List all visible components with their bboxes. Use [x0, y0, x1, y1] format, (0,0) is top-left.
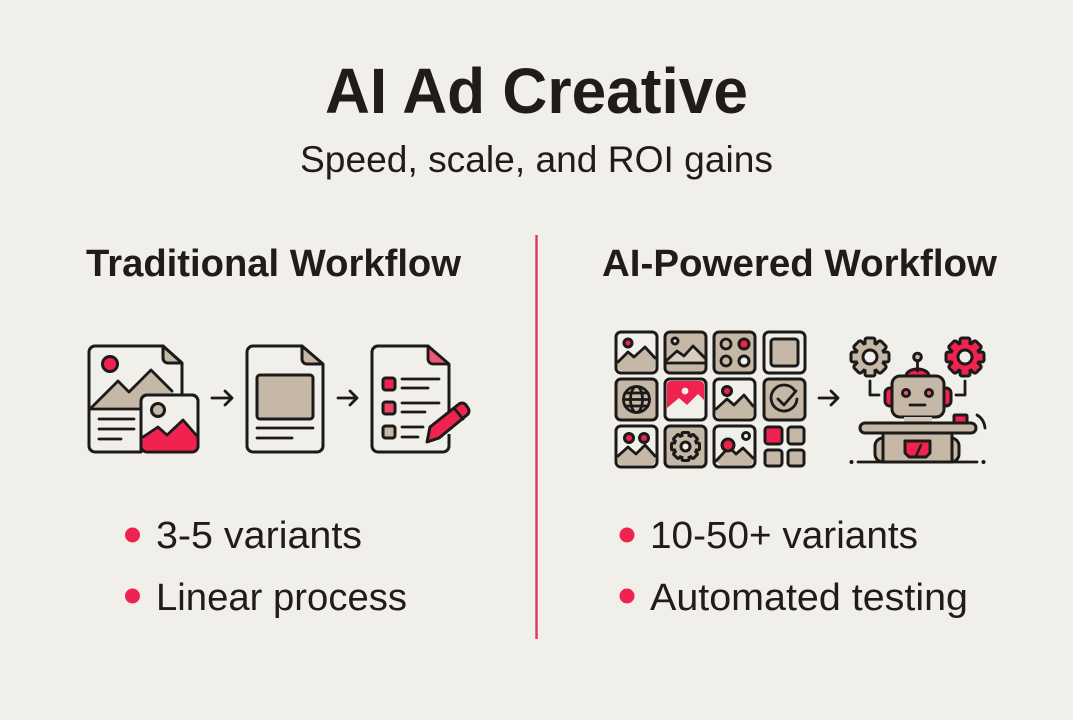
tile: image, red circle [714, 426, 755, 467]
tile: globe [616, 379, 657, 420]
list: AI workflow bullets [620, 515, 968, 619]
icon: red gear [946, 338, 984, 376]
tile: check circle [764, 379, 805, 420]
tile: red image [665, 379, 706, 420]
arrow: step one to two [212, 391, 232, 405]
list: AI workflow bullets: Automated testing [650, 577, 968, 619]
tile: image, two red suns [616, 426, 657, 467]
icon grid: creative variants [616, 332, 805, 467]
center divider [535, 235, 538, 639]
icon: image document [89, 346, 198, 452]
heading: AI-powered workflow: AI-Powered Workflow [602, 243, 997, 285]
tile: image, red sun [616, 332, 657, 373]
list: traditional workflow bullets: 3-5 variants [156, 515, 362, 557]
list: traditional workflow bullets [125, 515, 407, 619]
tile: four circles [714, 332, 755, 373]
tile: four small squares [765, 427, 804, 466]
icon: robot at desk with gears [850, 338, 986, 464]
icon: tan gear [851, 338, 889, 376]
icon: layout document [247, 346, 323, 452]
list: AI workflow bullets: 10-50+ variants [650, 515, 918, 557]
arrow: step two to three [338, 391, 357, 405]
title: AI Ad Creative [325, 55, 748, 127]
tile: framed square [764, 332, 805, 373]
tile: gear [665, 426, 706, 467]
list: traditional workflow bullets: Linear process [156, 577, 407, 619]
heading: traditional workflow: Traditional Workflow [86, 243, 461, 285]
icon: checklist document with pencil [372, 346, 469, 452]
subtitle: Speed, scale, and ROI gains [300, 139, 773, 180]
arrow: variants to robot [819, 391, 838, 405]
tile: image, red sun 2 [714, 379, 755, 420]
tile: image on tan [665, 332, 706, 373]
